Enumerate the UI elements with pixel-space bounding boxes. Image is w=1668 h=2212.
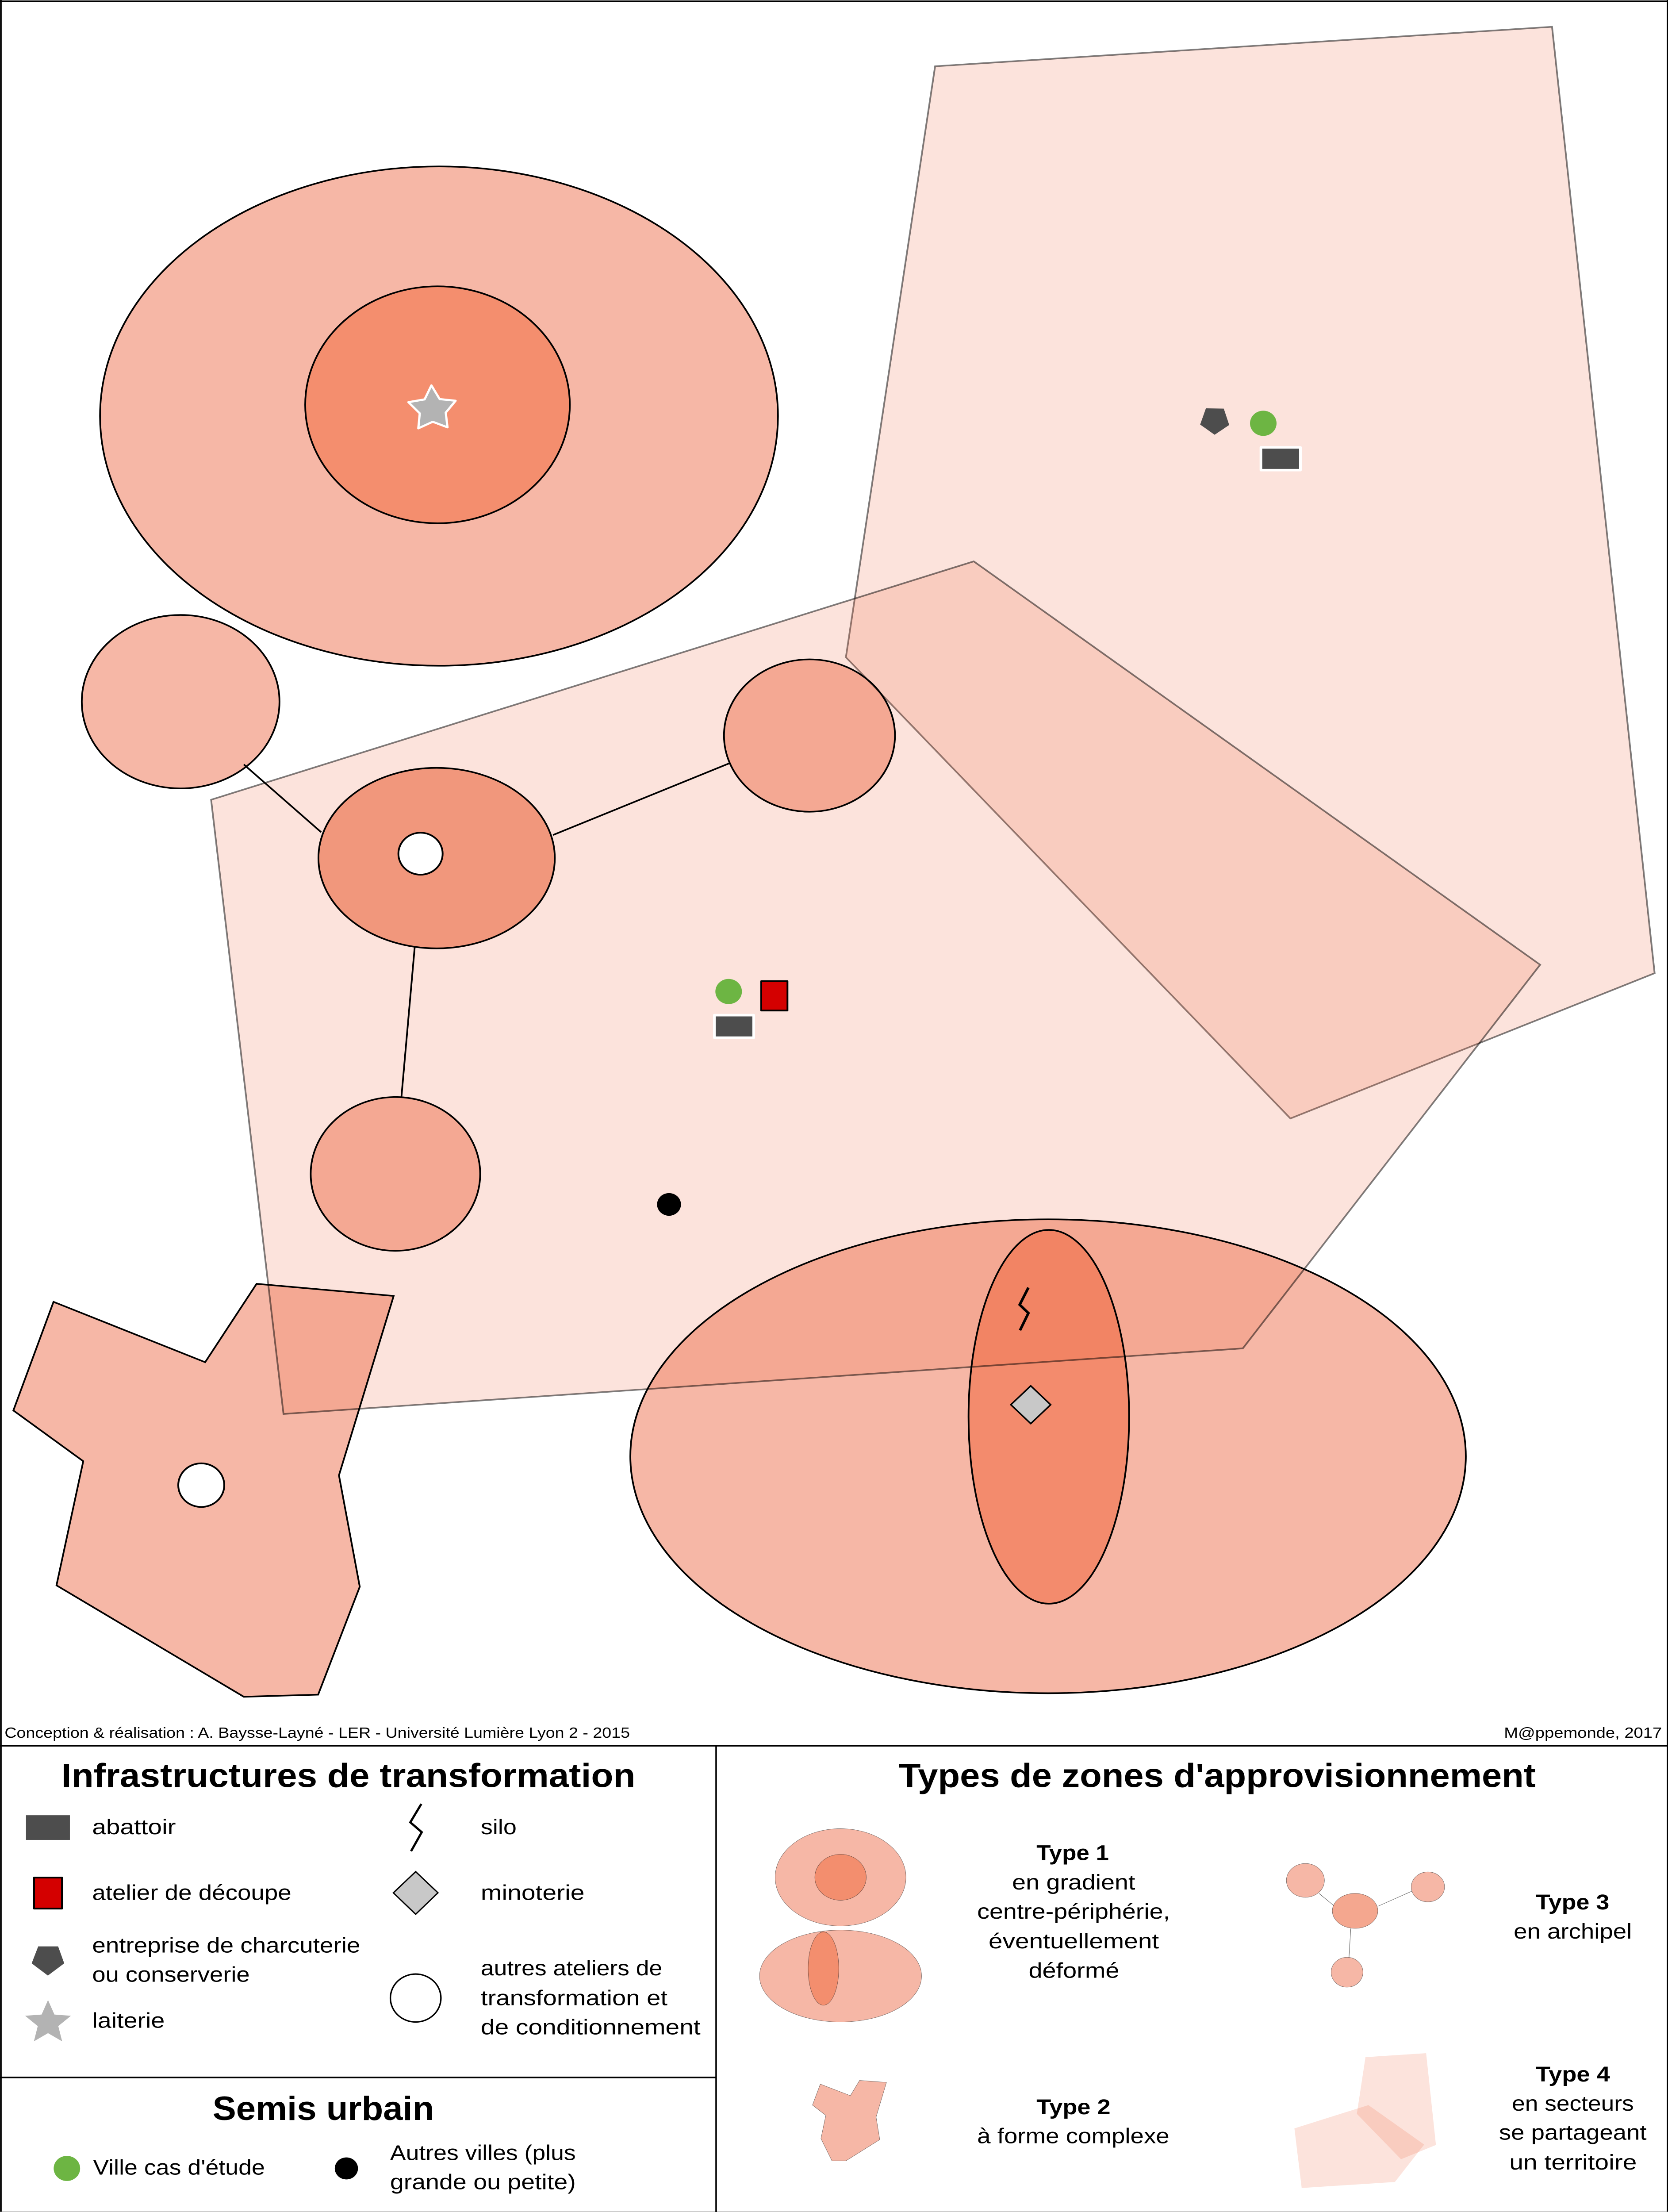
icon: case-study city, centre <box>715 979 742 1004</box>
archipelago: central patch <box>318 768 555 949</box>
icon: charcuterie pentagon, north-east <box>1200 408 1229 435</box>
legend icon: silo <box>410 1804 422 1851</box>
text: type 2 description <box>977 2096 1170 2148</box>
text: type 2 description: Type 2 <box>1036 2096 1111 2119</box>
legend label: dairy: laiterie <box>92 2009 165 2032</box>
pictogram: type 4 <box>1294 2053 1436 2188</box>
credits: author: Conception & réalisation : A. Baysse-Layné - LER - Université Lumière Lyon 2 - 2015 <box>4 1725 630 1741</box>
legend icon: dairy star <box>25 2000 71 2041</box>
legend label: flour mill: minoterie <box>481 1882 585 1905</box>
legend label: case-study city: Ville cas d'étude <box>93 2156 265 2179</box>
pictogram: type 1 <box>759 1828 921 2022</box>
icon: abattoir, north-east <box>1261 447 1300 470</box>
panel: transformation infrastructure legend <box>25 1756 701 2041</box>
legend icon: other workshops circle <box>391 1974 441 2022</box>
legend icon: flour mill diamond <box>393 1872 438 1914</box>
icon: abattoir, centre <box>714 1015 754 1038</box>
panel: supply zone types legend <box>759 1756 1647 2188</box>
icon: cutting workshop, centre <box>761 981 787 1010</box>
legend label: other workshops, line 3: de conditionnement <box>481 2016 701 2039</box>
text: type 2 description: à forme complexe <box>977 2125 1170 2148</box>
legend label: silo: silo <box>481 1816 517 1839</box>
zone: sector polygon north-east <box>846 27 1655 1118</box>
text: type 3 description: Type 3 <box>1536 1891 1609 1914</box>
icon: case-study city, north-east <box>1250 411 1277 436</box>
text: type 1 description: en gradient <box>1012 1871 1135 1894</box>
icon: flour mill diamond <box>1011 1386 1051 1424</box>
icon: other workshop, south-west <box>178 1463 224 1507</box>
pictogram: type 3 <box>1286 1863 1445 1987</box>
legend label: other workshops, line 2: transformation et <box>481 1986 667 2010</box>
icon: dairy star <box>408 385 456 428</box>
archipelago: satellite east <box>724 659 895 812</box>
zone: sector polygon centre <box>211 561 1540 1414</box>
legend label: cutting workshop: atelier de découpe <box>92 1882 291 1905</box>
heading: infrastructures: Infrastructures de transformation <box>61 1756 635 1794</box>
pictogram: type 2 <box>813 2081 886 2161</box>
legend icon: cutting workshop <box>34 1878 62 1909</box>
archipelago: satellite south <box>311 1097 480 1251</box>
text: type 4 description: en secteurs <box>1512 2092 1634 2115</box>
legend label: abattoir: abattoir <box>92 1816 176 1839</box>
text: type 1 description: Type 1 <box>1036 1842 1109 1865</box>
legend label: other cities, line 2: grande ou petite) <box>390 2171 576 2194</box>
zone: gradient zone north-west, outer ring <box>100 166 778 666</box>
text: type 4 description: Type 4 <box>1536 2063 1610 2086</box>
credits: journal: M@ppemonde, 2017 <box>1504 1725 1662 1741</box>
legend icon: charcuterie pentagon <box>32 1947 64 1976</box>
zone: complex shape south-west <box>13 1284 394 1697</box>
zone: gradient zone north-west, core <box>305 286 570 523</box>
text: type 1 description: déformé <box>1028 1959 1119 1982</box>
text: type 1 description <box>977 1842 1170 1982</box>
text: type 3 description <box>1514 1891 1632 1943</box>
panel: urban network legend <box>54 2089 576 2194</box>
panel: map of supply zones <box>13 27 1655 1697</box>
legend icon: abattoir <box>26 1815 70 1840</box>
legend label: conserverie: ou conserverie <box>92 1963 250 1986</box>
legend icon: other cities <box>335 2158 358 2179</box>
zone: deformed gradient zone south, outer ring <box>630 1219 1466 1693</box>
icon: other workshop, centre <box>399 833 443 875</box>
icon: other city <box>657 1193 681 1216</box>
text: type 3 description: en archipel <box>1514 1920 1632 1943</box>
text: type 4 description: un territoire <box>1509 2151 1637 2174</box>
zone outlines and archipelago links <box>13 166 1466 1697</box>
text: type 4 description <box>1499 2063 1647 2174</box>
text: type 4 description: se partageant <box>1499 2121 1647 2144</box>
legend label: other cities, line 1: Autres villes (plus <box>390 2142 576 2165</box>
legend label: charcuterie: entreprise de charcuterie <box>92 1934 360 1957</box>
icon: silo <box>1020 1288 1028 1330</box>
icons placed on the map <box>178 385 1300 1507</box>
text: type 1 description: centre-périphérie, <box>977 1900 1170 1924</box>
heading: zone types: Types de zones d'approvisionnement <box>899 1756 1536 1794</box>
legend label: other workshops, line 1: autres ateliers de <box>481 1957 662 1980</box>
archipelago: satellite north-west <box>82 615 280 788</box>
legend icon: case-study city <box>54 2156 80 2181</box>
text: type 1 description: éventuellement <box>989 1930 1159 1953</box>
heading: urban network: Semis urbain <box>213 2089 434 2127</box>
zone: deformed gradient zone south, core <box>969 1230 1129 1604</box>
